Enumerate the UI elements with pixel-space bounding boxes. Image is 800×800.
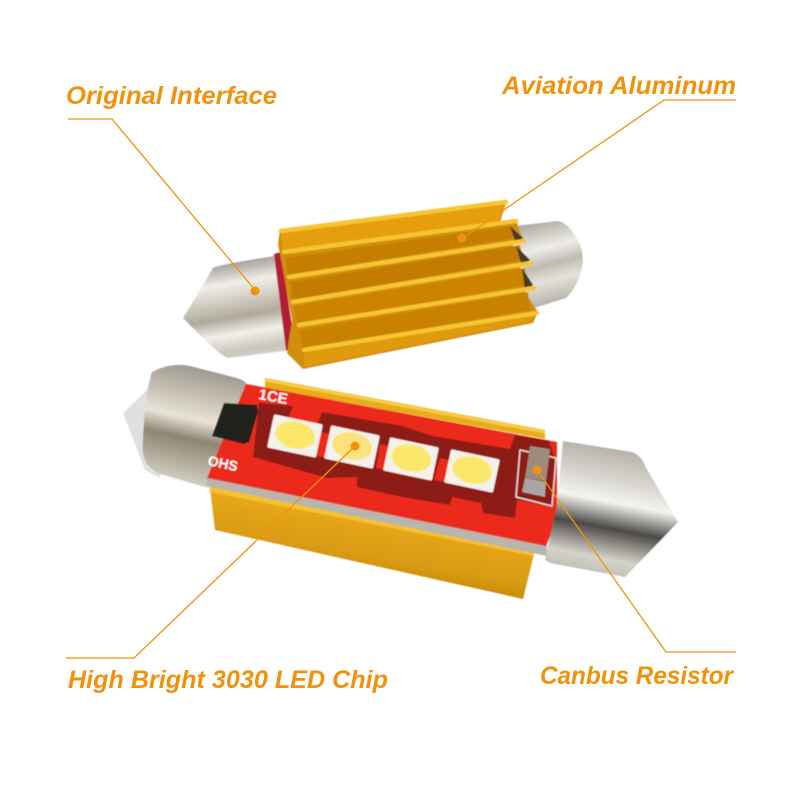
icon: aluminum heat sink: [278, 200, 538, 369]
icon: LED chip 1: [267, 414, 323, 458]
panel: top LED bulb: [183, 200, 583, 369]
icon: black inductor: [212, 403, 258, 444]
icon: left metal end cap: [183, 256, 292, 358]
icon: LED chip 3: [383, 437, 439, 481]
board marking: ROHS: OHS: [206, 452, 239, 474]
bright board patches: [317, 432, 329, 458]
icon: red circuit board: [206, 384, 557, 546]
callout: High Bright 3030 LED Chip: [66, 442, 388, 694]
icon: red circuit board edge: [274, 252, 294, 352]
icon: LED chip 2: [324, 425, 380, 469]
fin highlights: [281, 202, 537, 350]
icon: canbus resistor: [516, 446, 556, 506]
panel: bottom LED bulb: [123, 365, 678, 599]
icon: bulb tip left: [123, 368, 170, 478]
icon: left metal end cap: [143, 365, 248, 488]
icon: upper gold fin: [265, 378, 545, 439]
heading: Original Interface: Original Interface: [66, 82, 277, 110]
icon: right metal end cap: [545, 441, 678, 577]
icon: LED chip 4: [444, 449, 500, 493]
callout: Original Interface: [66, 82, 277, 296]
dark copper traces: [253, 403, 556, 518]
icon: lower gold fin: [210, 488, 535, 599]
callout: Canbus Resistor: [532, 466, 736, 690]
icon: right metal end cap: [515, 221, 583, 309]
callout: Aviation Aluminum: [458, 72, 736, 242]
icon: silver board edge: [207, 476, 547, 556]
heading: Aviation Aluminum: Aviation Aluminum: [501, 72, 736, 100]
heading: Canbus Resistor: Canbus Resistor: [540, 662, 734, 690]
board marking: CE: 1CE: [257, 386, 289, 408]
dark gaps behind fin ends: [510, 226, 533, 290]
heading: High Bright 3030 LED Chip: High Bright 3030 LED Chip: [68, 666, 388, 694]
